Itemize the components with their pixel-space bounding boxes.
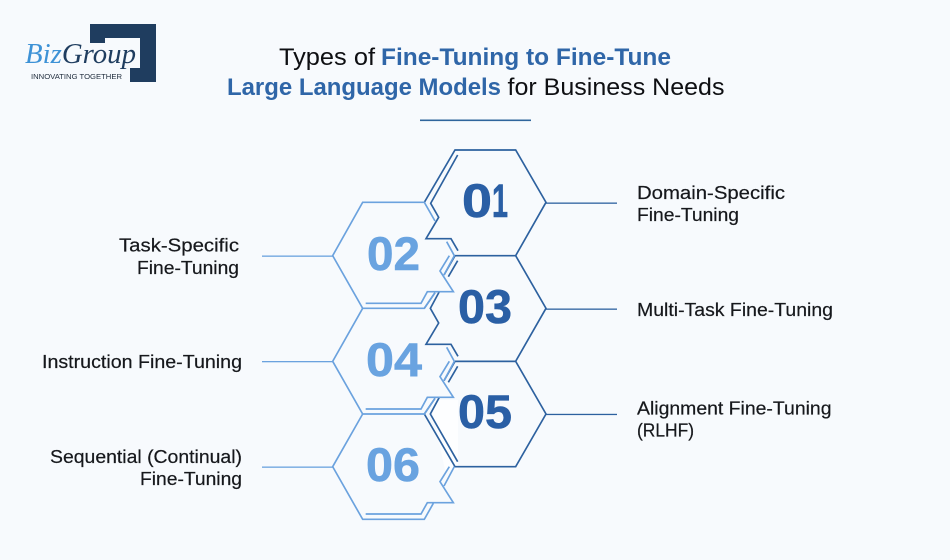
hexagon 03: 03 — [458, 280, 512, 333]
logo — [25, 24, 156, 82]
connector: 02 — [262, 256, 333, 257]
label: Domain-Specific Fine-Tuning: Domain-Specific — [637, 183, 785, 203]
hexagon 01: 1 — [492, 174, 508, 227]
title line 2: Large Language Models — [227, 74, 501, 101]
hexagon 01: 0 — [462, 174, 492, 227]
hexagon 05 — [424, 361, 546, 467]
title line 2: for Business Needs — [508, 74, 724, 101]
label: Alignment Fine-Tuning (RLHF): Alignment Fine-Tuning — [637, 398, 832, 418]
label: Task-Specific Fine-Tuning — [119, 236, 239, 278]
label: Task-Specific Fine-Tuning: Fine-Tuning — [137, 258, 239, 278]
connector: 01 — [546, 202, 617, 204]
label: Sequential (Continual) Fine-Tuning: Fine-Tuning — [140, 469, 242, 489]
label: Alignment Fine-Tuning (RLHF) — [637, 398, 832, 440]
hexagon 04: 04 — [366, 333, 422, 386]
hexagon 03 — [424, 256, 546, 361]
hexagon 02: 02 — [367, 227, 420, 280]
label: Domain-Specific Fine-Tuning — [637, 183, 785, 225]
logo: tagline: INNOVATING TOGETHER — [31, 72, 123, 81]
title line 2 — [227, 74, 724, 101]
label: Sequential (Continual) Fine-Tuning — [50, 447, 242, 489]
title line 1: Types of — [279, 44, 375, 71]
logo: navy bracket — [90, 24, 156, 82]
hexagon 02 — [333, 202, 454, 308]
hexagon 06: 06 — [366, 438, 420, 491]
soft glow behind hexagons — [430, 400, 458, 470]
hexagon 05: 05 — [458, 385, 512, 438]
hexagon 01 — [424, 150, 546, 256]
label: Multi-Task Fine-Tuning: Multi-Task Fine-Tuning — [637, 300, 833, 320]
title line 1: Fine-Tuning to Fine-Tune — [381, 44, 671, 71]
label: Task-Specific Fine-Tuning: Task-Specific — [119, 236, 239, 256]
connector: 04 — [262, 361, 333, 362]
label: Alignment Fine-Tuning (RLHF): (RLHF) — [637, 420, 694, 440]
title underline — [420, 120, 531, 121]
logo: wordmark: BizGroup — [25, 38, 136, 70]
label: Instruction Fine-Tuning: Instruction Fine-Tuning — [42, 352, 242, 372]
connector: 05 — [546, 414, 617, 415]
hexagon 06 — [333, 414, 454, 519]
hexagon 04 — [333, 308, 454, 414]
label: Sequential (Continual) Fine-Tuning: Sequential (Continual) — [50, 447, 242, 467]
connector: 06 — [262, 466, 333, 468]
label: Domain-Specific Fine-Tuning: Fine-Tuning — [637, 205, 739, 225]
title — [227, 44, 724, 101]
connector: 03 — [546, 308, 617, 310]
